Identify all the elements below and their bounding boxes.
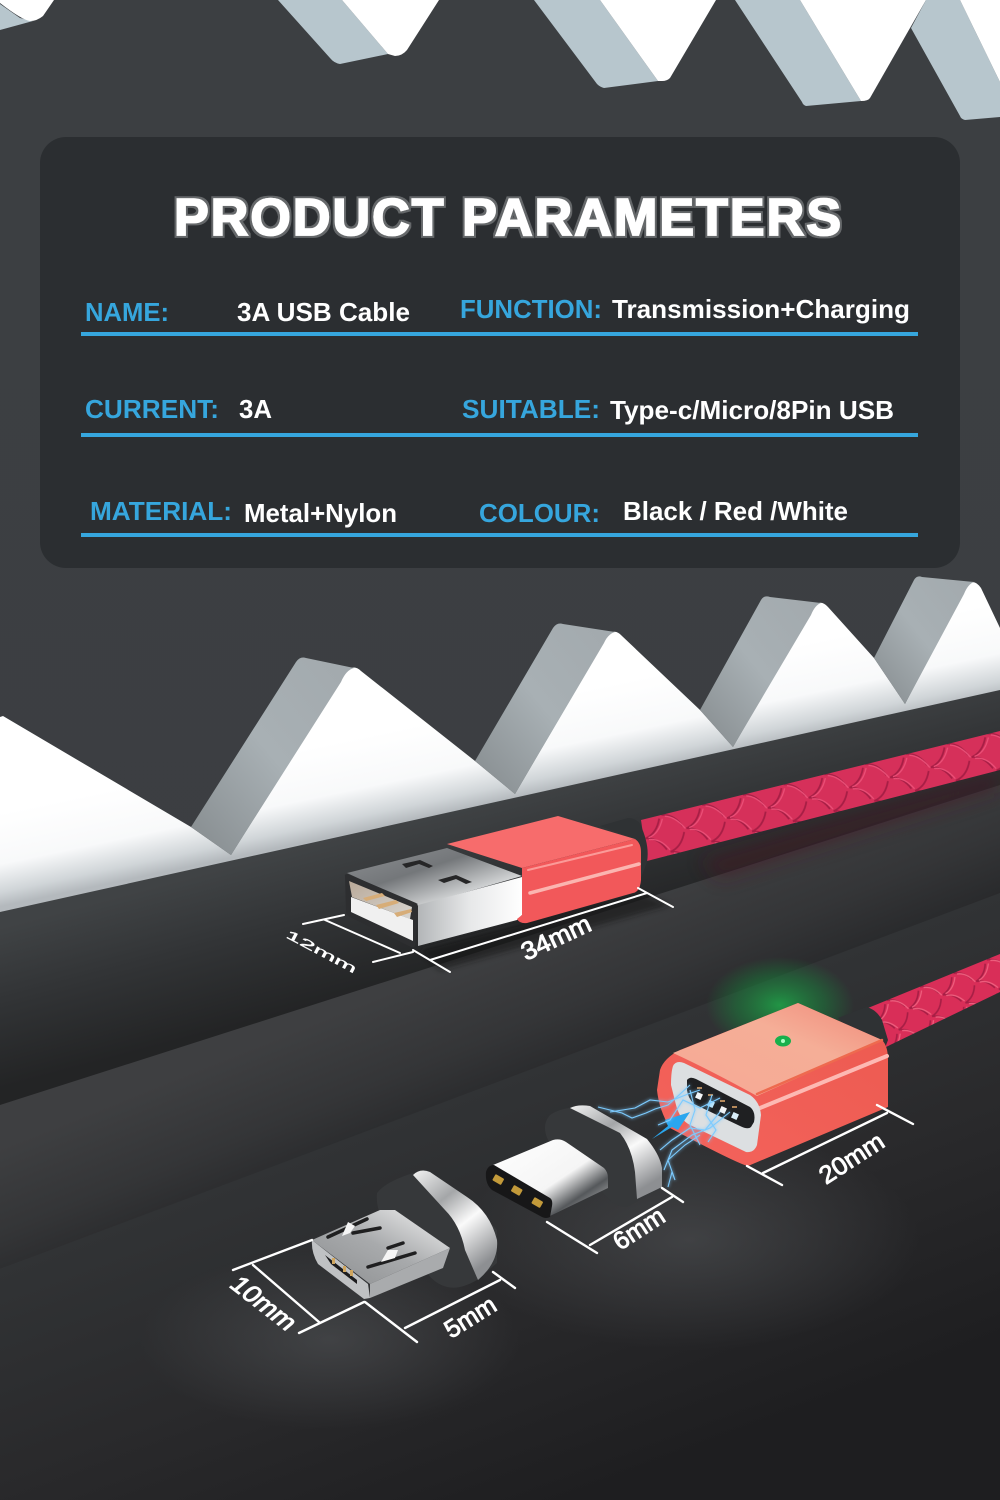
row 1 function bbox=[460, 294, 910, 324]
silver rim bbox=[570, 1105, 662, 1199]
micro slots and clips bbox=[328, 1219, 415, 1267]
cable 1 braided red bbox=[641, 731, 1000, 861]
label 20mm: 20mm bbox=[814, 1127, 890, 1190]
row 3 material: Metal+Nylon bbox=[244, 498, 397, 528]
blue arrow bbox=[652, 1112, 690, 1139]
strain relief collar bbox=[600, 818, 648, 878]
front face bbox=[345, 874, 418, 947]
row 3 divider bbox=[81, 533, 918, 537]
row 1 name bbox=[85, 297, 410, 327]
USB-C magnetic tip bbox=[486, 1105, 663, 1218]
6mm bracket bbox=[547, 1188, 683, 1253]
metal top bbox=[347, 848, 522, 906]
row 3 colour: COLOUR: bbox=[479, 498, 600, 528]
row 1 function: Transmission+Charging bbox=[612, 294, 910, 324]
socket pins bbox=[695, 1092, 739, 1120]
silver rim bbox=[413, 1171, 497, 1280]
row 1 function: FUNCTION: bbox=[460, 294, 602, 324]
housing highlights bbox=[528, 845, 639, 893]
label 34mm: 34mm bbox=[517, 910, 596, 966]
34mm bracket bbox=[413, 888, 673, 972]
row 2 current: CURRENT: bbox=[85, 394, 219, 424]
dark head bbox=[377, 1173, 497, 1288]
row 1 name: 3A USB Cable bbox=[237, 297, 410, 327]
row 3 colour: Black / Red /White bbox=[623, 496, 848, 526]
label 5mm: 5mm bbox=[439, 1291, 502, 1344]
12mm bracket bbox=[303, 915, 413, 962]
label 10mm: 10mm bbox=[223, 1272, 303, 1335]
USB-A connector bbox=[345, 816, 670, 970]
body side bbox=[657, 1003, 888, 1166]
middle zig-zag paper teeth bbox=[0, 576, 1000, 912]
top slots bbox=[402, 860, 472, 884]
C plug gold pins bbox=[492, 1174, 543, 1208]
metal side bbox=[418, 877, 522, 946]
body top bbox=[673, 1003, 882, 1096]
cable 2 braided red bbox=[868, 954, 1000, 1047]
row 2 divider bbox=[81, 433, 918, 437]
red housing side bbox=[517, 839, 641, 923]
row 2 suitable: SUITABLE: bbox=[462, 394, 600, 424]
green LED bbox=[775, 1036, 791, 1046]
label 12mm: 12mm bbox=[284, 928, 359, 976]
micro plug top bbox=[312, 1210, 450, 1284]
micro USB dimension brackets bbox=[233, 1240, 515, 1342]
dark head bbox=[545, 1107, 663, 1207]
panel: product parameters bbox=[40, 137, 960, 568]
C plug body bbox=[493, 1139, 608, 1216]
row 2 suitable: Type-c/Micro/8Pin USB bbox=[610, 395, 894, 425]
lightning arcs and arrow bbox=[598, 1085, 730, 1187]
pin gold tips bbox=[697, 1087, 737, 1108]
micro plug side bbox=[370, 1248, 450, 1298]
panel background bbox=[40, 137, 960, 568]
USB-C dimension brackets bbox=[547, 1105, 913, 1253]
metal dark edge bbox=[346, 874, 418, 905]
electric arcs bbox=[598, 1085, 730, 1187]
row 3 material bbox=[90, 496, 397, 528]
heading: PRODUCT PARAMETERS bbox=[174, 189, 841, 247]
10mm bracket bbox=[233, 1240, 364, 1333]
row 1 name: NAME: bbox=[85, 297, 169, 327]
dark socket bbox=[687, 1078, 754, 1128]
micro pins bbox=[332, 1258, 353, 1276]
5mm bracket bbox=[365, 1272, 515, 1342]
green LED glow bbox=[706, 957, 854, 1053]
top zig-zag paper teeth bbox=[0, 0, 1000, 120]
silver socket ring bbox=[671, 1062, 761, 1152]
white tongue bbox=[351, 897, 413, 941]
body highlights bbox=[757, 1040, 887, 1108]
C plug front bbox=[486, 1165, 552, 1218]
20mm bracket bbox=[747, 1105, 913, 1185]
red housing top bbox=[447, 816, 635, 868]
row 2 current: 3A bbox=[239, 394, 272, 424]
lower dark surfaces bbox=[0, 683, 1000, 1500]
magnetic connector bbox=[657, 957, 888, 1166]
label 6mm: 6mm bbox=[608, 1202, 670, 1256]
collar bbox=[838, 1007, 888, 1048]
inner cavity bbox=[349, 881, 412, 919]
row 3 material: MATERIAL: bbox=[90, 496, 232, 526]
micro plug front bbox=[312, 1240, 370, 1299]
row 2 suitable bbox=[462, 394, 894, 425]
gold pins bbox=[363, 893, 412, 917]
micro cavity bbox=[325, 1255, 357, 1284]
row 3 colour bbox=[479, 496, 848, 528]
shadow under plug bbox=[420, 893, 670, 970]
USB-A dimensions bbox=[303, 888, 673, 972]
micro USB magnetic tip bbox=[312, 1171, 497, 1299]
row 1 divider bbox=[81, 332, 918, 336]
